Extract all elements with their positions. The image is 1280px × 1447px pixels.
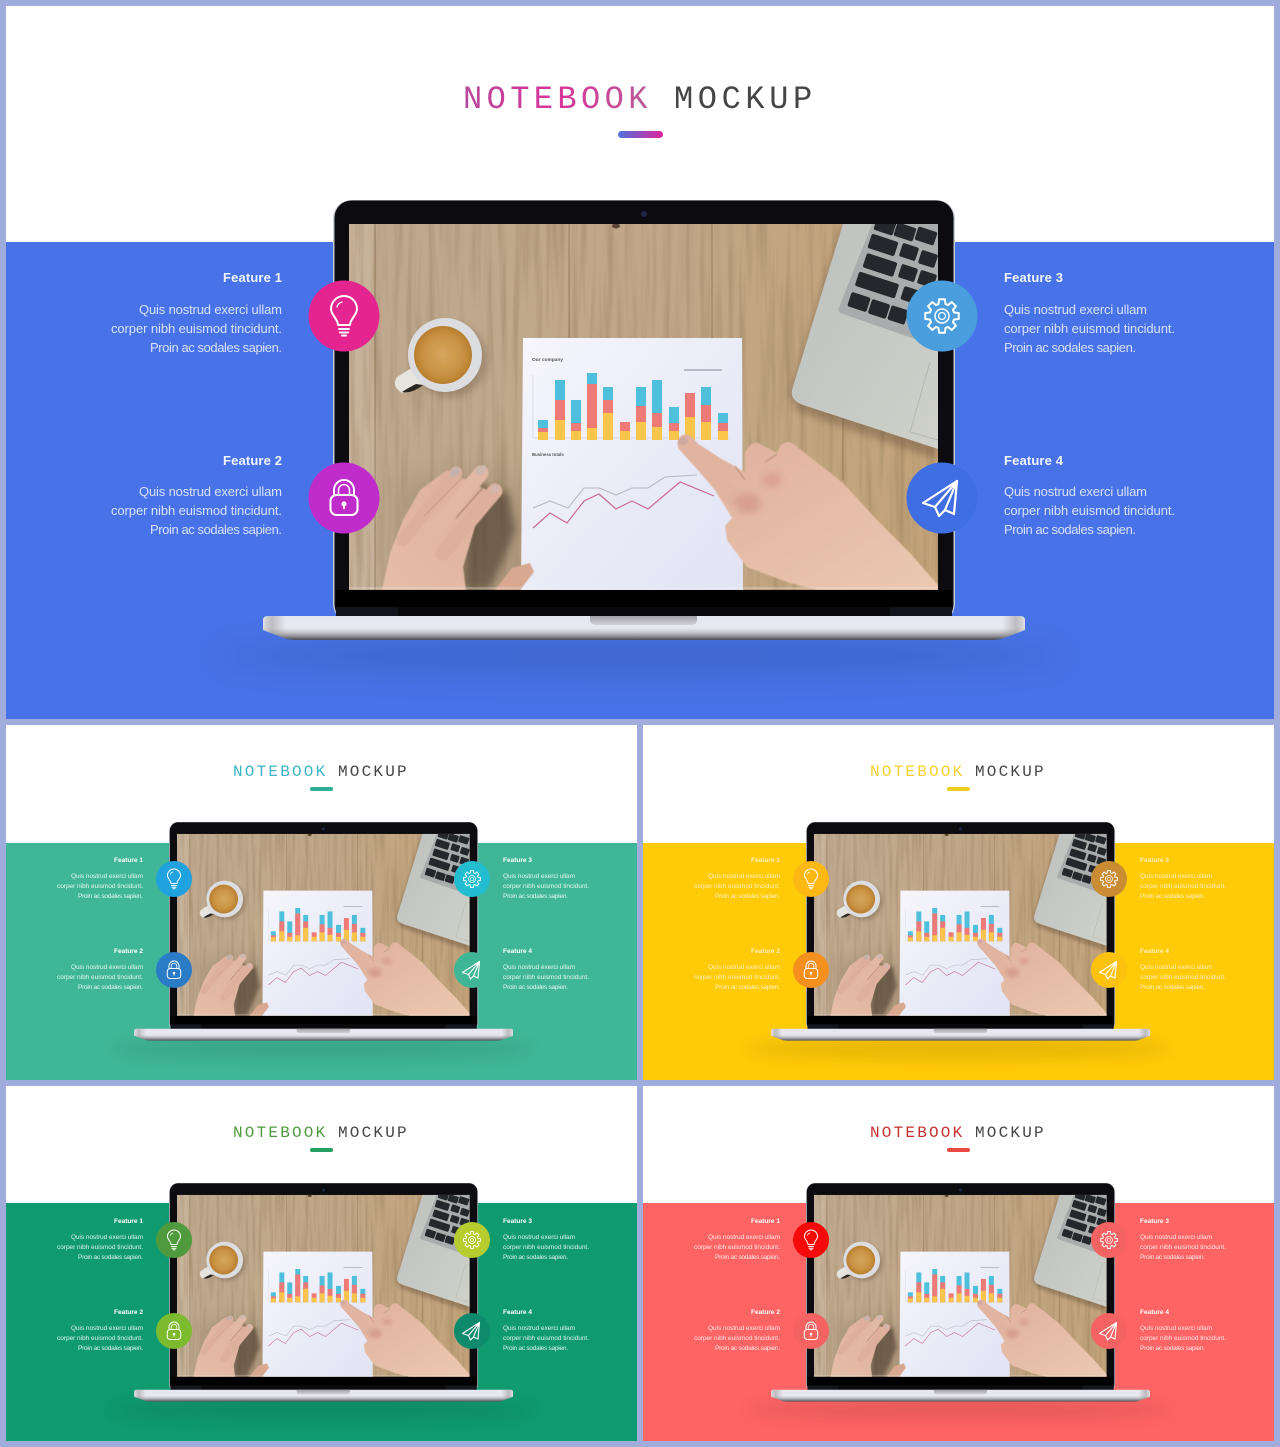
text: right features: Proin ac sodales sapien. [1140, 893, 1205, 900]
icon: paper plane [906, 462, 978, 534]
text: right features: corper nibh euismod tincidunt. [1140, 883, 1226, 890]
icon: padlock [308, 462, 380, 534]
title underline [947, 1148, 970, 1152]
text: right features: corper nibh euismod tincidunt. [1140, 974, 1226, 981]
text: feature 2: Quis nostrud exerci ullam [139, 484, 282, 499]
laptop mockup [108, 1183, 535, 1420]
text: left features: corper nibh euismod tincidunt. [57, 974, 143, 981]
icon: light bulb [793, 1222, 829, 1258]
text: left features: Quis nostrud exerci ullam [71, 1234, 143, 1241]
text: right features: Feature 4 [1140, 1309, 1169, 1316]
text: feature 2: Proin ac sodales sapien. [150, 522, 282, 537]
text: right features: Feature 3 [503, 857, 532, 864]
text: left features: corper nibh euismod tincidunt. [694, 1335, 780, 1342]
text: feature 4: corper nibh euismod tincidunt. [1004, 503, 1175, 518]
text: right features: Feature 4 [1140, 948, 1169, 955]
text: feature 3 [1004, 270, 1175, 355]
text: right features: Quis nostrud exerci ullam [503, 1234, 575, 1241]
text: feature 4: Feature 4 [1004, 453, 1064, 468]
text: left features: corper nibh euismod tincidunt. [57, 1244, 143, 1251]
text: left features [694, 857, 780, 991]
band: coral background [643, 1203, 1274, 1441]
text: right features [1140, 857, 1226, 991]
text: right features: Quis nostrud exerci ullam [503, 1325, 575, 1332]
text: left features: Quis nostrud exerci ullam [71, 964, 143, 971]
text: left features: Feature 2 [114, 948, 143, 955]
text: feature 4: Quis nostrud exerci ullam [1004, 484, 1147, 499]
text: left features [57, 1218, 143, 1352]
text: left features: Proin ac sodales sapien. [715, 1254, 780, 1261]
laptop mockup [108, 822, 535, 1059]
text: left features: corper nibh euismod tincidunt. [694, 883, 780, 890]
icon: light bulb [156, 861, 192, 897]
text: feature 3: Proin ac sodales sapien. [1004, 340, 1136, 355]
text: left features: Quis nostrud exerci ullam [708, 1325, 780, 1332]
text: left features: corper nibh euismod tincidunt. [694, 974, 780, 981]
title underline [310, 1148, 333, 1152]
laptop mockup [745, 822, 1172, 1059]
title [463, 81, 817, 118]
text: feature 3: corper nibh euismod tincidunt. [1004, 321, 1175, 336]
text: right features: corper nibh euismod tincidunt. [503, 883, 589, 890]
text: right features: corper nibh euismod tincidunt. [1140, 1244, 1226, 1251]
title [233, 763, 409, 781]
panel: deep green variant [6, 1086, 637, 1441]
title: NOTEBOOK [463, 81, 652, 118]
title [870, 763, 1046, 781]
text: feature 2: corper nibh euismod tincidunt. [111, 503, 282, 518]
text: right features: corper nibh euismod tincidunt. [503, 1335, 589, 1342]
title: MOCKUP [338, 763, 409, 781]
text: right features: Quis nostrud exerci ullam [1140, 964, 1212, 971]
icon: padlock [793, 952, 829, 988]
title: MOCKUP [674, 81, 817, 118]
text: right features: corper nibh euismod tincidunt. [503, 1244, 589, 1251]
text: left features: Feature 1 [751, 857, 780, 864]
text: left features: Proin ac sodales sapien. [715, 893, 780, 900]
panel: main blue slide [6, 6, 1274, 719]
text: left features [57, 857, 143, 991]
text: right features: Feature 3 [1140, 857, 1169, 864]
laptop mockup [210, 200, 1070, 676]
title: NOTEBOOK [233, 1124, 327, 1142]
icon: gear [454, 861, 490, 897]
icon: paper plane [1091, 952, 1127, 988]
icon: light bulb [793, 861, 829, 897]
text: right features: Feature 4 [503, 948, 532, 955]
text: feature 1: Quis nostrud exerci ullam [139, 302, 282, 317]
text: right features: Proin ac sodales sapien. [503, 893, 568, 900]
text: left features: Quis nostrud exerci ullam [708, 1234, 780, 1241]
text: left features: Proin ac sodales sapien. [78, 1345, 143, 1352]
title: MOCKUP [338, 1124, 409, 1142]
panel: yellow variant [643, 725, 1274, 1080]
text: left features: corper nibh euismod tincidunt. [57, 883, 143, 890]
band: teal background [6, 843, 637, 1080]
text: left features: corper nibh euismod tincidunt. [57, 1335, 143, 1342]
text: left features: Feature 1 [114, 857, 143, 864]
text: left features: Quis nostrud exerci ullam [71, 1325, 143, 1332]
panel: coral red variant [643, 1086, 1274, 1441]
text: left features: Proin ac sodales sapien. [78, 893, 143, 900]
text: left features: Feature 1 [751, 1218, 780, 1225]
text: right features: Quis nostrud exerci ullam [1140, 1234, 1212, 1241]
icon: padlock [156, 1313, 192, 1349]
text: left features: Quis nostrud exerci ullam [708, 964, 780, 971]
band: blue background [6, 242, 1274, 719]
text: left features: Feature 2 [751, 948, 780, 955]
icon: padlock [156, 952, 192, 988]
text: feature 2: Feature 2 [223, 453, 282, 468]
text: feature 1: corper nibh euismod tincidunt. [111, 321, 282, 336]
text: left features: corper nibh euismod tincidunt. [694, 1244, 780, 1251]
title: NOTEBOOK [870, 763, 964, 781]
text: right features: Feature 3 [503, 1218, 532, 1225]
text: right features: Quis nostrud exerci ullam [503, 964, 575, 971]
text: feature 4: Proin ac sodales sapien. [1004, 522, 1136, 537]
title: NOTEBOOK [233, 763, 327, 781]
text: right features: Proin ac sodales sapien. [1140, 1345, 1205, 1352]
text: left features: Proin ac sodales sapien. [715, 984, 780, 991]
icon: gear [1091, 1222, 1127, 1258]
text: left features: Feature 2 [751, 1309, 780, 1316]
title: MOCKUP [975, 1124, 1046, 1142]
text: right features: Feature 3 [1140, 1218, 1169, 1225]
text: right features: Feature 4 [503, 1309, 532, 1316]
text: left features: Quis nostrud exerci ullam [71, 873, 143, 880]
title underline [310, 787, 333, 791]
text: feature 3: Quis nostrud exerci ullam [1004, 302, 1147, 317]
text: right features: Quis nostrud exerci ullam [1140, 1325, 1212, 1332]
text: left features [694, 1218, 780, 1352]
icon: padlock [793, 1313, 829, 1349]
title [233, 1124, 409, 1142]
text: right features [503, 1218, 589, 1352]
icon: paper plane [1091, 1313, 1127, 1349]
icon: paper plane [454, 952, 490, 988]
text: right features [503, 857, 589, 991]
text: feature 1: Proin ac sodales sapien. [150, 340, 282, 355]
text: left features: Proin ac sodales sapien. [715, 1345, 780, 1352]
text: feature 3: Feature 3 [1004, 270, 1063, 285]
icon: gear [906, 280, 978, 352]
text: right features: Proin ac sodales sapien. [503, 1345, 568, 1352]
title: NOTEBOOK [870, 1124, 964, 1142]
title: MOCKUP [975, 763, 1046, 781]
text: right features [1140, 1218, 1226, 1352]
laptop mockup: Business totals [532, 452, 564, 457]
icon: gear [1091, 861, 1127, 897]
laptop mockup [745, 1183, 1172, 1420]
band: deep green background [6, 1203, 637, 1441]
text: feature 4 [1004, 453, 1175, 537]
text: right features: Proin ac sodales sapien. [1140, 984, 1205, 991]
text: feature 1 [111, 270, 282, 355]
icon: light bulb [308, 280, 380, 352]
icon: gear [454, 1222, 490, 1258]
text: left features: Proin ac sodales sapien. [78, 1254, 143, 1261]
title underline [947, 787, 970, 791]
text: left features: Feature 1 [114, 1218, 143, 1225]
text: right features: corper nibh euismod tincidunt. [1140, 1335, 1226, 1342]
title underline [618, 131, 663, 138]
text: feature 1: Feature 1 [223, 270, 282, 285]
text: left features: Proin ac sodales sapien. [78, 984, 143, 991]
text: right features: Quis nostrud exerci ullam [1140, 873, 1212, 880]
text: feature 2 [111, 453, 282, 537]
icon: paper plane [454, 1313, 490, 1349]
text: left features: Quis nostrud exerci ullam [708, 873, 780, 880]
text: right features: Proin ac sodales sapien. [503, 984, 568, 991]
panel: teal green variant [6, 725, 637, 1080]
text: left features: Feature 2 [114, 1309, 143, 1316]
text: right features: Proin ac sodales sapien. [1140, 1254, 1205, 1261]
title [870, 1124, 1046, 1142]
band: yellow background [643, 843, 1274, 1080]
icon: light bulb [156, 1222, 192, 1258]
text: right features: corper nibh euismod tincidunt. [503, 974, 589, 981]
laptop mockup: Our company [532, 357, 563, 363]
text: right features: Proin ac sodales sapien. [503, 1254, 568, 1261]
text: right features: Quis nostrud exerci ullam [503, 873, 575, 880]
